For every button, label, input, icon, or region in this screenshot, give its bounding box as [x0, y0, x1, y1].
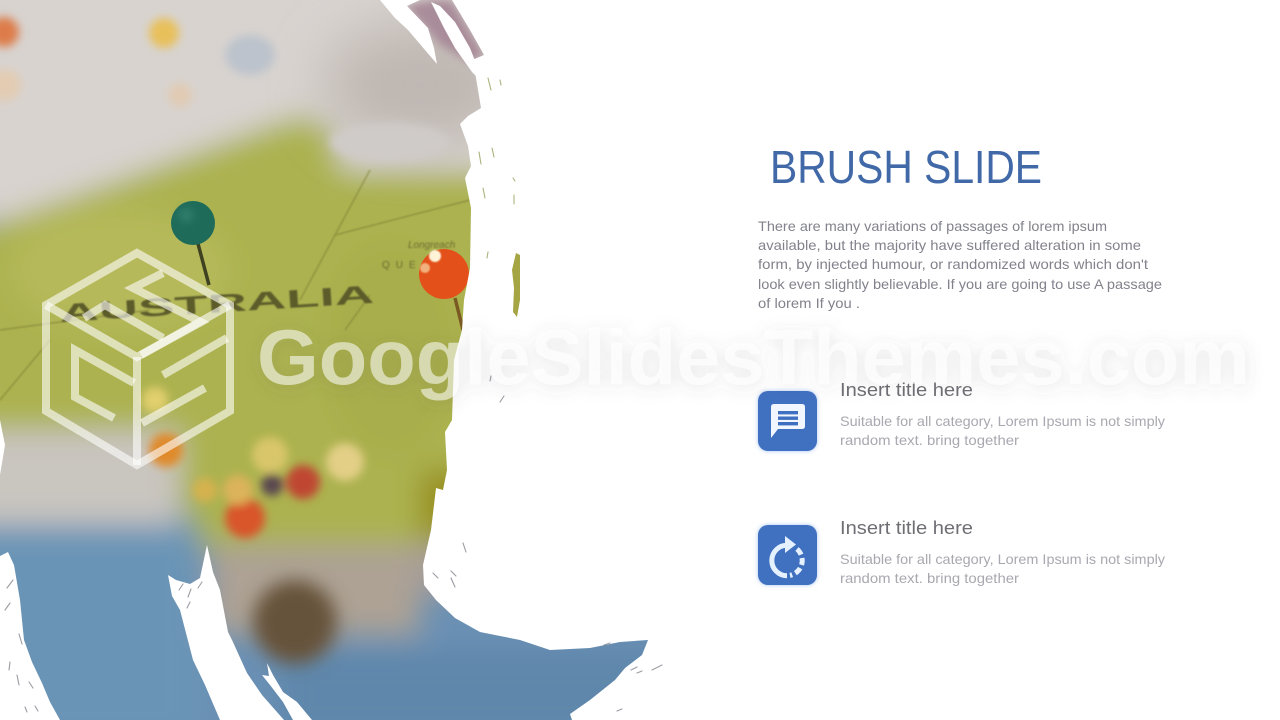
text block: item one: Insert title here: [840, 379, 973, 400]
icon: orange pin: [419, 249, 469, 330]
text block: intro paragraph: [758, 218, 1162, 311]
map small labels: Longreach: [408, 240, 456, 251]
map small labels: [382, 240, 456, 271]
small left edge: [0, 420, 5, 475]
text block: intro paragraph: available, but the majority have suffered alteration in some: [758, 237, 1141, 253]
olive slivers: [512, 253, 520, 317]
grey haze upper right: [325, 23, 515, 147]
left streak top: [380, 0, 437, 64]
brush flecks: [5, 78, 662, 712]
icon: green pin: [171, 201, 215, 285]
bottom thin brush: [262, 663, 312, 720]
map small labels: QUE: [382, 260, 422, 271]
panel: map photo background: [0, 0, 720, 720]
text block: item two: random text. bring together: [840, 570, 1019, 586]
text block: intro paragraph: form, by injected humour, or randomized words which don't: [758, 256, 1148, 272]
text block: item one: Suitable for all category, Lorem Ipsum is not simply: [840, 413, 1165, 429]
text block: item two: Insert title here: [840, 517, 973, 538]
text block: item one: [840, 379, 1165, 448]
text block: item two: Suitable for all category, Lorem Ipsum is not simply: [840, 551, 1165, 567]
text block: intro paragraph: There are many variations of passages of lorem ipsum: [758, 218, 1107, 234]
icon: refresh: [758, 525, 817, 585]
map lines: [0, 170, 470, 400]
text block: item one: random text. bring together: [840, 432, 1019, 448]
map text: Australia: AUSTRALIA: [59, 281, 375, 328]
cloud detail: [225, 35, 450, 162]
second streak top: [431, 2, 484, 84]
bottom middle brush: [168, 545, 284, 720]
icon: chat bubble: [758, 391, 817, 451]
blurred foreground pin: [253, 580, 337, 664]
text block: intro paragraph: look even slightly believable. If you are going to use A passage: [758, 276, 1162, 292]
watermark logo: [46, 253, 230, 465]
text block: intro paragraph: of lorem If you .: [758, 295, 860, 311]
title: BRUSH SLIDE: [770, 141, 1042, 193]
text block: item two: [840, 517, 1165, 586]
watermark text: GoogleSlidesThemes.com: [257, 313, 1250, 401]
purple shadow top of map: [405, 0, 484, 62]
bottom left brush: [0, 552, 60, 720]
blurred pins: [0, 17, 364, 538]
